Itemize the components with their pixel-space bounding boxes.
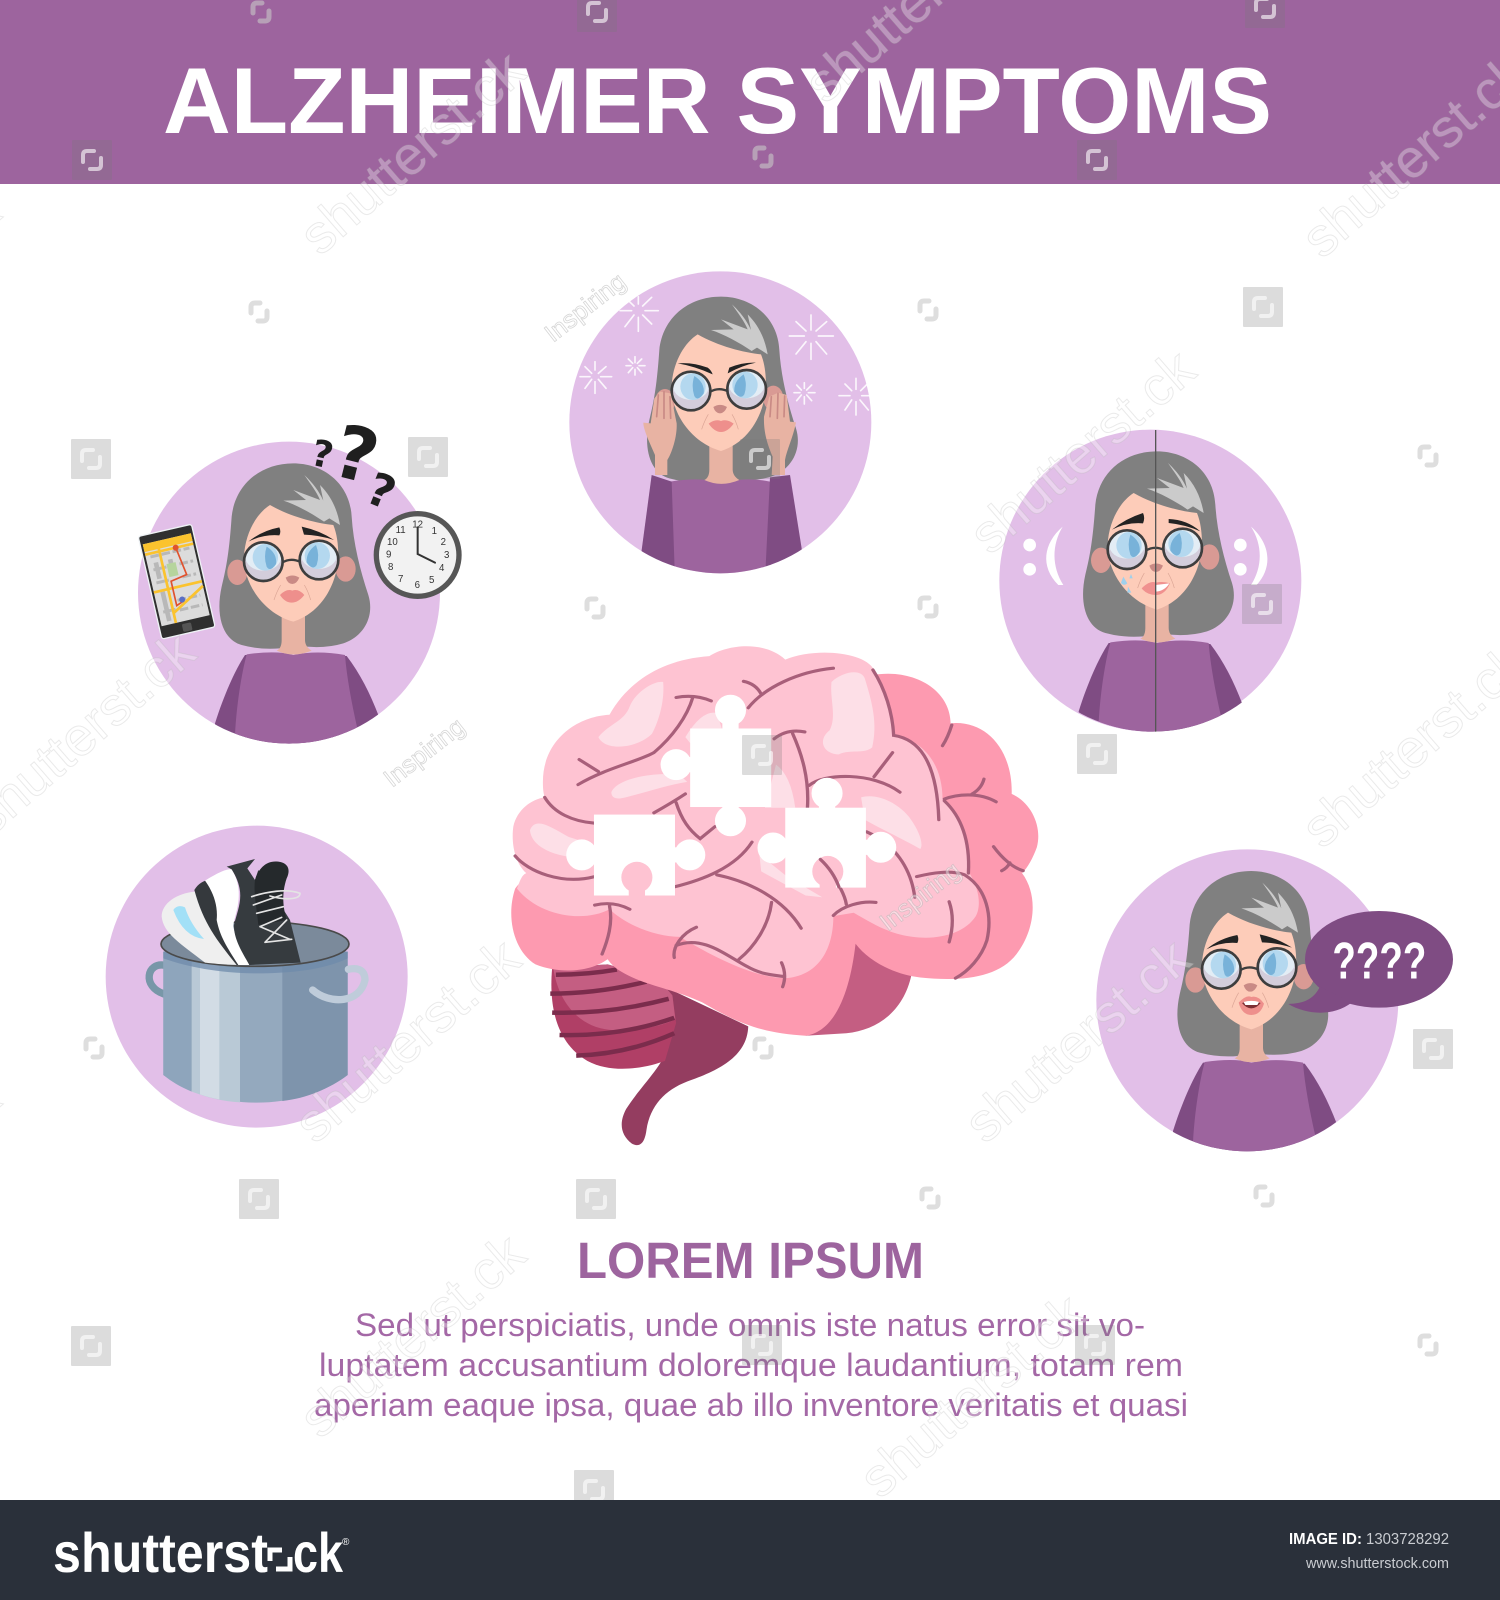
icon: sad emoticon [1023, 527, 1063, 585]
panel: forgetting head pressure, headache [569, 271, 871, 580]
icon: pot left handle [149, 965, 165, 994]
icon: happy emoticon [1234, 527, 1267, 585]
icon: clock: 3 [444, 550, 449, 561]
image id: IMAGE ID: 1303728292 [1289, 1531, 1449, 1548]
body text [314, 1307, 1188, 1423]
watermark overlay: shutterst.ck [289, 39, 537, 266]
watermark overlay: Inspiring [378, 712, 470, 793]
header banner [0, 0, 1500, 184]
footer logo: ck [293, 1521, 344, 1584]
brain highlights [530, 672, 921, 897]
footer logo: ® [342, 1537, 350, 1548]
icon: pot [161, 922, 349, 1103]
watermark overlay: Inspiring [539, 267, 631, 348]
watermark overlay: shutterst.ck [284, 927, 532, 1154]
watermark overlay: shutterst.ck [849, 1282, 1097, 1509]
icon: clock: 8 [388, 562, 393, 573]
heading: lorem ipsum: LOREM IPSUM [577, 1232, 924, 1289]
brain illustration [511, 646, 1038, 1145]
body text: aperiam eaque ipsa, quae ab illo inventore veritatis et quasi [314, 1387, 1188, 1423]
icon: clock: 7 [398, 574, 403, 585]
icon: clock [376, 514, 459, 596]
panel: trouble speaking [1096, 849, 1453, 1154]
body text: Sed ut perspiciatis, unde omnis iste natus error sit vo- [355, 1307, 1145, 1343]
panel: misplacing objects, shoes in a pot [106, 826, 408, 1128]
speech bubble [1288, 911, 1453, 1013]
panel: mood swings [999, 430, 1301, 735]
brain creases [515, 668, 1023, 987]
woman: confused [215, 463, 378, 747]
inner brain layer [513, 646, 979, 978]
icon: phone with map [138, 524, 215, 639]
icon: clock: 6 [415, 580, 420, 591]
watermark overlay: Inspiring [874, 856, 966, 937]
puzzle piece right [758, 778, 896, 889]
icon: clock: 5 [429, 575, 434, 586]
panel: disorientation in time and place [138, 409, 459, 747]
icon: pot right handle [313, 969, 365, 1000]
icon: question marks [307, 409, 403, 521]
rear lower lobe [806, 940, 912, 1036]
icon: clock: 4 [439, 563, 445, 574]
speech bubble: ???? [1332, 931, 1426, 989]
icon: sparkles [580, 297, 870, 415]
divider line through face [1154, 430, 1158, 732]
icon: clock: 12 [412, 519, 423, 530]
icon: question marks: ? [307, 431, 337, 478]
title: ALZHEIMER SYMPTOMS [163, 48, 1272, 153]
icon: clock: 10 [387, 537, 398, 548]
outer brain layer [511, 674, 1038, 1036]
watermark overlay: shutterst.ck [959, 338, 1207, 565]
woman: half sad half happy [1079, 451, 1242, 735]
footer logo: shutterst [53, 1521, 268, 1584]
icon: clock: 2 [441, 537, 446, 548]
icon: clock: 9 [386, 549, 391, 560]
icon: question marks: ? [325, 409, 387, 502]
watermark overlay: shutterst.ck [954, 927, 1202, 1154]
woman: struggling to speak [1173, 871, 1336, 1154]
cerebellum [550, 964, 676, 1069]
icon: question marks: ? [359, 462, 403, 521]
footer bar [0, 1500, 1500, 1600]
icon: clock: 1 [432, 526, 437, 537]
website: www.shutterstock.com [1305, 1555, 1449, 1572]
body text: luptatem accusantium doloremque laudantium, totam rem [319, 1347, 1183, 1383]
puzzle piece top [661, 695, 771, 836]
woman: dizzy, hands on head [640, 297, 803, 580]
puzzle piece left [566, 815, 705, 896]
brain stem [622, 985, 748, 1145]
icon: shoes [162, 859, 301, 965]
icon: clock: 11 [396, 525, 406, 536]
watermark overlay: shutterst.ck [289, 1222, 537, 1449]
